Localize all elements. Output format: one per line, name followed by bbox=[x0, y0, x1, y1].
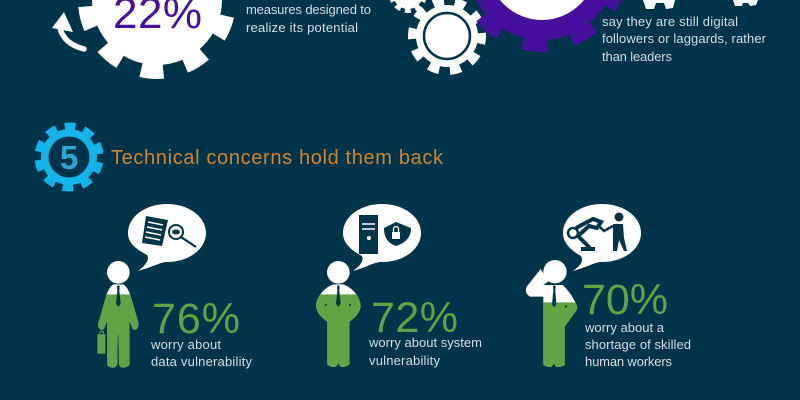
icon: curved arrow bbox=[52, 12, 84, 49]
text: followers description: followers or laggards, rather bbox=[602, 31, 767, 46]
speech bubble: server and shield bbox=[343, 204, 421, 271]
text: measures description: realize its potential bbox=[246, 20, 358, 35]
panel: 22 percent gear bbox=[52, 0, 371, 71]
panel: data vulnerability bbox=[97, 204, 252, 369]
text: workers caption: human workers bbox=[585, 354, 672, 369]
stat: 76%: 76% bbox=[152, 295, 240, 343]
icon: small top gear bbox=[392, 0, 424, 10]
text: system vulnerability caption: vulnerability bbox=[369, 353, 440, 368]
text: data vulnerability caption bbox=[150, 337, 252, 369]
icon: purple gear bbox=[464, 0, 620, 44]
text: data vulnerability caption: worry about bbox=[150, 337, 221, 352]
icon: white gear with ring bbox=[413, 2, 481, 70]
text: followers description: than leaders bbox=[602, 49, 672, 64]
speech bubble: document and magnifier bbox=[128, 204, 206, 271]
icon: person with hand raised bbox=[526, 260, 577, 367]
text: followers description: say they are still digital bbox=[602, 14, 738, 29]
panel: digital followers gears bbox=[392, 0, 767, 70]
icon: number 5 gear: 5 bbox=[60, 139, 78, 176]
panel: shortage of skilled workers bbox=[526, 204, 691, 369]
icon: person hands on hips bbox=[316, 261, 361, 367]
text: system vulnerability caption: worry about system bbox=[368, 335, 482, 350]
icon: small gear fragment left bbox=[643, 0, 675, 9]
text: data vulnerability caption: data vulnerability bbox=[151, 354, 252, 369]
icon: person with briefcase bbox=[97, 261, 139, 368]
panel: system vulnerability bbox=[316, 204, 482, 368]
icon: number 5 gear bbox=[39, 127, 99, 187]
text: measures description bbox=[246, 2, 371, 35]
text: measures description: measures designed to bbox=[246, 2, 371, 17]
icon: large white gear bbox=[86, 0, 228, 71]
speech bubble: robot arm and worker bbox=[563, 204, 641, 271]
text: workers caption: worry about a bbox=[584, 320, 665, 335]
stat: 70%: 70% bbox=[582, 276, 668, 324]
text: system vulnerability caption bbox=[368, 335, 482, 368]
stat: 72%: 72% bbox=[371, 294, 458, 342]
title: Technical concerns hold them back bbox=[111, 147, 444, 169]
heading: section 5 bbox=[39, 127, 444, 187]
icon: small gear fragment right bbox=[733, 0, 758, 6]
text: workers caption bbox=[584, 320, 691, 369]
text: workers caption: shortage of skilled bbox=[585, 337, 691, 352]
text: followers description bbox=[602, 14, 767, 64]
